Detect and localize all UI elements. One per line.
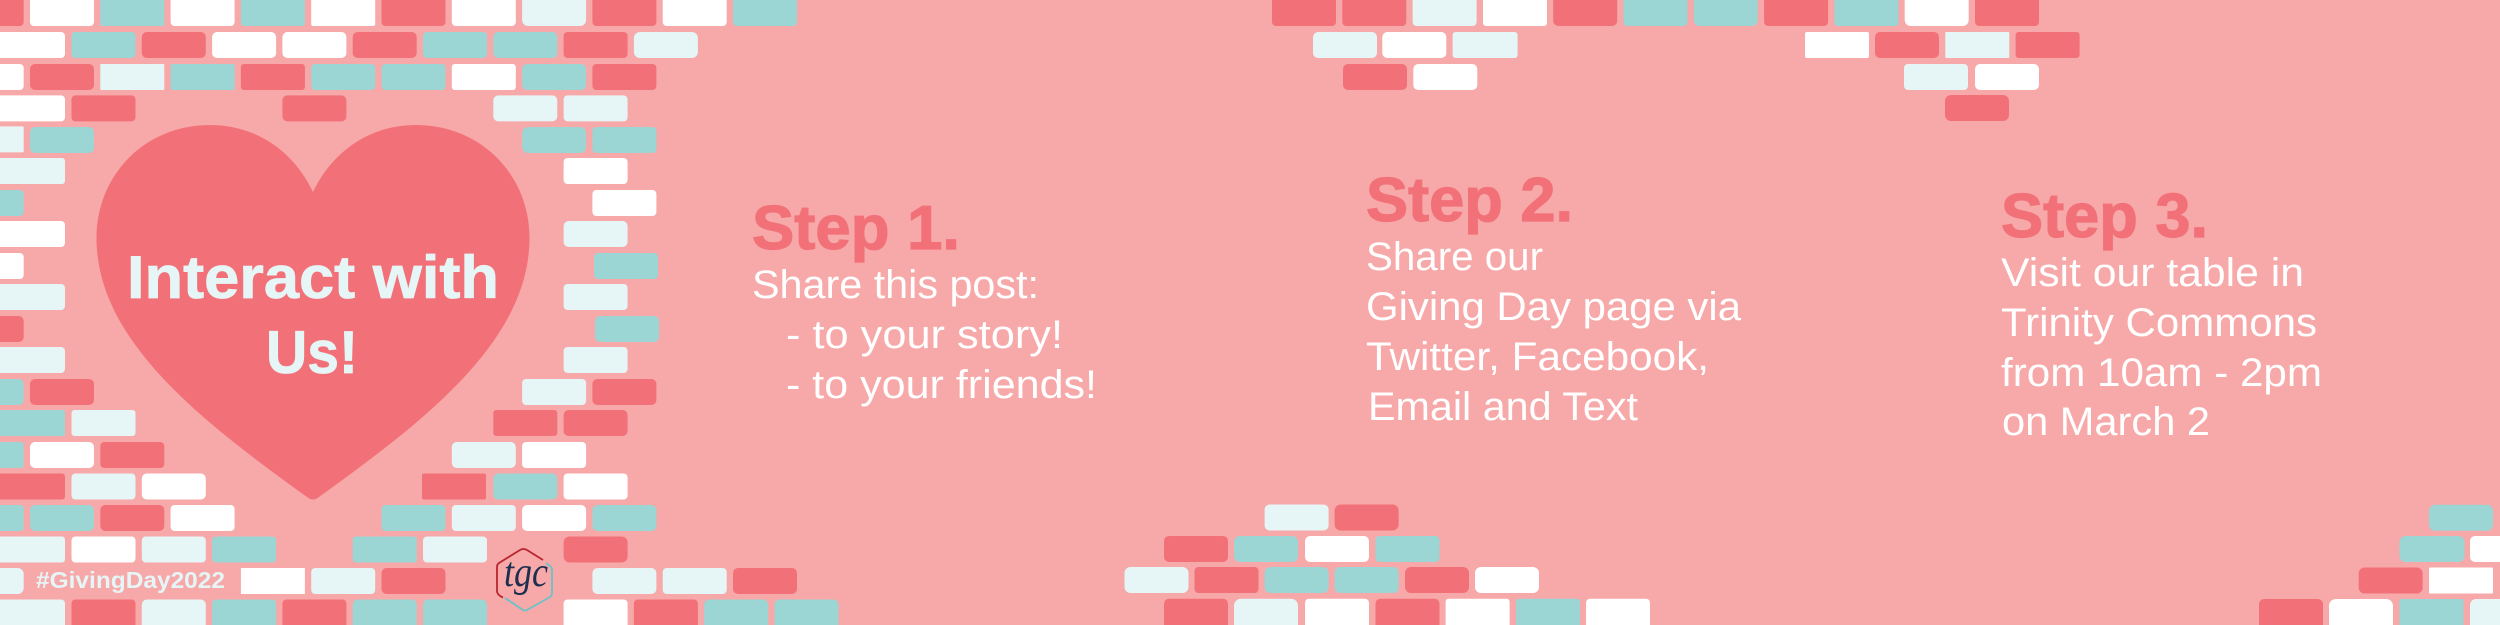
text block: step 3: on March 2: [2002, 400, 2210, 444]
icon: heart: [96, 125, 530, 500]
icon: tgc logo: tgc: [504, 550, 548, 596]
text block: step 1: [752, 194, 1097, 407]
text block: step 3: from 10am - 2pm: [2001, 351, 2322, 395]
panel: brick frame around heart: [0, 0, 838, 625]
text block: step 1: - to your friends!: [786, 363, 1097, 407]
text block: step 3: Visit our table in: [2001, 251, 2304, 295]
text block: step 1: Share this post:: [752, 263, 1039, 307]
bricks: bottom middle: [1124, 504, 1650, 625]
text block: step 2: Twitter, Facebook,: [1366, 335, 1709, 379]
text block: step 1: Step 1.: [752, 194, 960, 263]
text block: step 3: Trinity Commons: [2001, 301, 2317, 345]
text block: step 2: Giving Day page via: [1366, 285, 1741, 329]
text block: step 2: Email and Text: [1368, 385, 1638, 429]
heading: Interact with Us: [127, 244, 499, 386]
text block: step 2: [1366, 166, 1741, 429]
hashtag: #GivingDay2022: [36, 567, 225, 593]
text block: step 1: - to your story!: [786, 313, 1063, 357]
heading: Interact with Us: Us!: [266, 319, 358, 386]
bricks: top middle: [1272, 0, 2080, 121]
icon: tgc logo: [497, 549, 552, 610]
heading: Interact with Us: Interact with: [127, 244, 499, 311]
bricks: bottom right: [2259, 505, 2500, 625]
text block: step 3: [2001, 182, 2322, 444]
text block: step 3: Step 3.: [2001, 182, 2208, 251]
text block: step 2: Share our: [1366, 235, 1543, 279]
text block: step 2: Step 2.: [1366, 166, 1573, 235]
